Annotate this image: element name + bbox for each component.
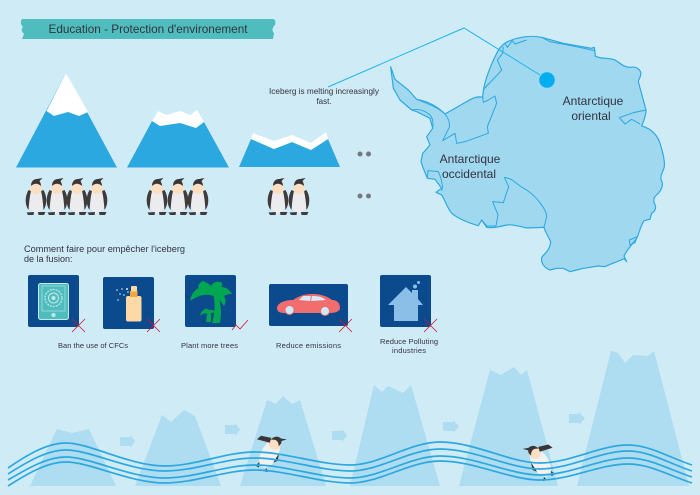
iceberg note: fast. xyxy=(316,97,332,106)
background icebergs growing in size xyxy=(30,351,689,486)
ellipsis dots: upper xyxy=(358,152,371,156)
title banner: Education - Protection d'environement xyxy=(48,22,248,36)
label: Antarctique oriental: Antarctique xyxy=(563,94,624,108)
label: plant trees: Plant more trees xyxy=(181,341,238,350)
ocean waves xyxy=(8,442,692,486)
title banner xyxy=(21,19,276,39)
map of Antarctica xyxy=(391,36,664,272)
leader line with location marker xyxy=(328,28,555,88)
label: reduce polluting industries: industries xyxy=(392,346,426,355)
icon: ban CFC refrigerator xyxy=(28,275,85,332)
iceberg note: Iceberg is melting increasingly xyxy=(269,87,379,96)
mountain with large ice cap xyxy=(16,73,117,168)
label: ban CFCs: Ban the use of CFCs xyxy=(58,341,128,350)
icon: aerosol spray xyxy=(103,277,160,332)
arrows between icebergs xyxy=(120,412,585,448)
penguins: four xyxy=(26,178,107,215)
mountain with small ice cap xyxy=(239,132,340,167)
ellipsis dots: lower xyxy=(358,194,371,198)
label: Antarctique occidental: occidental xyxy=(442,167,496,181)
how-to heading: de la fusion: xyxy=(24,254,73,264)
penguins: two xyxy=(268,178,309,215)
icon: car xyxy=(269,284,352,332)
mountain with medium ice cap xyxy=(127,110,229,168)
label: Antarctique oriental: oriental xyxy=(571,109,611,123)
penguin diving: left xyxy=(245,427,289,475)
icon: house with smoke xyxy=(380,275,437,332)
penguins: three xyxy=(147,178,208,215)
label: reduce polluting industries: Reduce Polluting xyxy=(380,337,438,346)
label: Antarctique occidental: Antarctique xyxy=(440,152,501,166)
label: reduce emissions: Reduce emissions xyxy=(276,341,341,350)
penguin diving: right xyxy=(521,436,565,484)
how-to heading: Comment faire pour empêcher l'iceberg xyxy=(24,244,185,254)
icon: palm tree xyxy=(185,275,248,330)
